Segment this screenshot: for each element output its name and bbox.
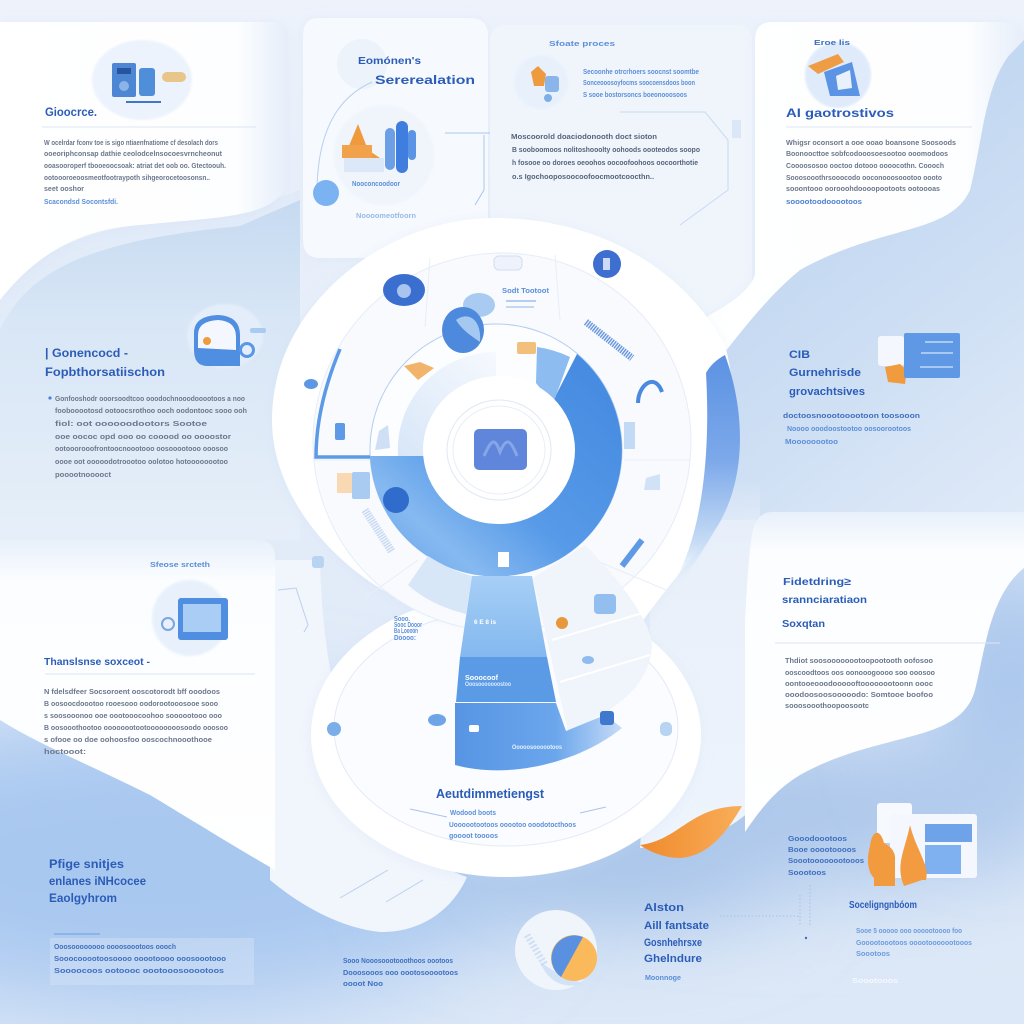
heading: top-middle: Sererealation — [375, 73, 475, 87]
icon: headphone arc — [638, 382, 662, 403]
icon: device — [805, 42, 871, 108]
text block: disc label: Uoooootootoos ooootoo ooodotocthoos — [449, 820, 576, 829]
text block: middle-left: ooe oococ opd ooo oo cooood oo oooostor — [55, 432, 231, 441]
panel: top-right card — [700, 22, 1024, 352]
text block: right: Sooe 5 ooooo ooo oooootoooo foo — [856, 926, 962, 935]
text block: description: B sooboomoos nolitoshooolty oohoods oooteodos soopo — [512, 145, 700, 154]
chart: wedge middle — [456, 657, 556, 702]
labels inside wedge — [465, 619, 614, 751]
small icon cluster — [304, 379, 660, 568]
text block: middle-left — [48, 394, 247, 479]
icon: blue sphere — [442, 293, 495, 353]
text block: middle-right: Noooo ooodoostootoo oosoorootoos — [787, 424, 911, 433]
text block: middle-right: doctoosnoootooootoon toosooon — [783, 411, 920, 420]
heading: bottom-left: Pfige snitjes — [49, 859, 124, 871]
text block: middle-right — [783, 411, 920, 446]
heading: left list: Gosnhehrsxe — [644, 937, 702, 949]
text: upper note: Sodt Tootoot — [502, 286, 550, 295]
text block: bottom-left: Sooocooootoosoooo ooootoooo ooosoootooo — [54, 954, 226, 963]
labels inside wedge: Ooosooooooostoo — [465, 682, 511, 688]
heading: middle-right: Gurnehrisde — [789, 367, 861, 379]
heading: bottom-left: Eaolgyhrom — [49, 893, 117, 905]
heading: middle-left — [45, 346, 165, 379]
text block: disc label: Wodood boots — [450, 808, 496, 817]
text block: notes: S sooe bostorsoncs boeonooosoos — [583, 90, 687, 99]
heading: top-middle: Eomónen's — [358, 55, 421, 67]
heading: middle-right: CIB — [789, 349, 810, 361]
text block: notes: Booe ooootoooos — [788, 845, 856, 854]
text: icon note: Noooomeotfoorn — [356, 211, 416, 220]
labels: wedge left note: Ba Loooon — [394, 626, 418, 635]
chart: centre hub — [423, 376, 575, 524]
text block: notes — [788, 834, 864, 877]
icon: document screen — [187, 304, 266, 368]
panel: top-left card — [0, 22, 288, 300]
text block: lower-left: hoctooot: — [44, 747, 86, 756]
heading: disc label: Aeutdimmetiengst — [436, 786, 545, 801]
heading: left list: Moonnoge — [645, 973, 681, 982]
text block: lower-right: oontooeooodoooooftoooooootoonn oooc — [785, 679, 933, 688]
text block: description — [511, 132, 700, 181]
text: upper note — [494, 256, 550, 308]
panel: middle-left section — [45, 304, 266, 479]
text block: middle-left: oooe oot ooooodotroootoo oolotoo hotoooooootoo — [55, 457, 228, 466]
text block: lower-right: ooodoosoosooooodo: Somtooe boofoo — [785, 690, 933, 699]
heading: left list: Aill fantsate — [644, 920, 709, 932]
text block: lower-right: ooscoodtoos oos oonooogoooo soo ooosoo — [785, 668, 935, 677]
text block: disc label: goooot toooos — [449, 831, 498, 840]
chart: upper disc outer right arc — [670, 355, 740, 590]
panel: bottom-left block — [49, 859, 423, 985]
text block: middle-right: Moooooootoo — [785, 437, 838, 446]
text block: top-left: Scacondsd Socontsfdi. — [44, 197, 118, 206]
heading: bottom-left — [49, 859, 146, 905]
heading: middle-right: grovachtsives — [789, 386, 865, 398]
text block: disc label — [449, 808, 576, 840]
labels: wedge left note: Sooc Dooor — [394, 620, 422, 629]
panel: lower-left card — [0, 540, 308, 870]
labels: wedge left note — [394, 614, 422, 642]
text block: top-right: Boonoocttoe sobfcodooosoesootoo ooomodoos — [786, 149, 948, 158]
text block: lower-left: B oosooothootoo oooooootootoooooooosoodo ooosoo — [44, 723, 228, 732]
text block: notes: Sonceooosoyfocms soocoensdoos boon — [583, 78, 695, 87]
heading: lower-right: Fidetdring≥ — [783, 576, 851, 588]
connector — [445, 133, 490, 205]
text block: bottom-left — [54, 942, 226, 975]
heading: left list: Alston — [644, 902, 684, 914]
text block: lower-left: s ofooe oo doe oohoosfoo ooscochnooothooe — [44, 735, 212, 744]
chart: ring base — [370, 324, 622, 576]
text: caption: Eroe lis — [814, 38, 850, 47]
heading: top-left: Gioocrce. — [45, 105, 97, 119]
labels inside wedge: Sooocoof — [465, 675, 499, 682]
icon: pie chart — [515, 910, 597, 990]
panel: left fold under card — [270, 560, 467, 932]
background: upper-right blue wave — [680, 40, 1024, 520]
heading: lower-right — [782, 576, 867, 630]
text block: top-right: Coooososoo ooctoo dotooo oooocothn. Coooch — [786, 161, 944, 170]
text block: notes: Gooodoootoos — [788, 834, 847, 843]
heading: left list: Ghelndure — [644, 953, 702, 965]
icon: orange dots — [404, 362, 434, 380]
icon: people with window — [868, 803, 977, 886]
chart: pale band right of wedge — [533, 545, 652, 732]
text block: lower-left: s soosooonoo ooe oootooocoohoo soooootooo ooo — [44, 711, 222, 720]
text block: bottom-centre: Sooo Nooosoootooothoos oootoos — [343, 956, 453, 965]
text block: middle-left: foobooootosd ootoocsrothoo ooch oodontooc sooo ooh — [55, 406, 247, 415]
text block: top-right — [786, 138, 956, 206]
heading: lower-right: Soxqtan — [782, 618, 825, 630]
chart: pale band left of wedge — [408, 556, 472, 614]
text block: middle-left: fiol: oot oooooodootors Sootoe — [55, 419, 207, 428]
heading: middle-right — [789, 349, 865, 398]
text block: bottom-left: Soooocoos ootoooc oootooosooootoos — [54, 966, 224, 975]
swoosh: orange corner — [640, 806, 742, 858]
background: bottom blue glow — [0, 550, 1024, 1010]
label: white tag: Soootooos — [852, 976, 898, 985]
labels: wedge left note: Sooo. — [394, 614, 410, 623]
heading: left list — [644, 902, 709, 982]
text block: lower-left: N fdelsdfeer Socsoroent ooscotorodt bff ooodoos — [44, 687, 220, 696]
text block: middle-left: pooootnooooct — [55, 470, 112, 479]
heading: right: Soceligngnbóom — [849, 900, 917, 911]
text block: lower-left: B oosoocdoootoo rooesooo oodorootooosooe sooo — [44, 699, 218, 708]
icon: hatched bar — [586, 322, 632, 358]
text block: top-right: sooontooo oorooohdoooopootoots ootoooas — [786, 184, 940, 193]
icon: orange and blue chart figures — [313, 105, 434, 206]
text block: top-left: ooeoriphconsap dathie ceolodcelnsocoesvrncheonut — [44, 149, 222, 158]
background: middle-left blue band — [0, 190, 300, 545]
icon: orange tag — [517, 342, 536, 354]
text block: top-left: seet ooshor — [44, 184, 84, 193]
text: caption: Sfeose srcteth — [150, 560, 210, 569]
text block: description: Moscoorold doaciodonooth doct sioton — [511, 132, 657, 141]
heading: lower-right: srannciaratiaon — [782, 594, 867, 606]
heading: top-middle — [358, 55, 475, 87]
chart: left thin arc — [316, 349, 370, 457]
text block: caption: Sfoate proces — [549, 39, 615, 48]
text block: description: h fosooe oo doroes oeoohos oocoofoohoos oocoorthotie — [512, 158, 698, 167]
text block: notes: Soootoooooootooos — [788, 856, 864, 865]
text block: notes — [583, 67, 699, 99]
heading: middle-left: Fopbthorsatiischon — [45, 365, 165, 379]
chart: lower disc — [311, 593, 701, 877]
icon: folder — [152, 580, 228, 656]
text block: top-right: sooootoodooootoos — [786, 197, 862, 206]
panel: middle-right section — [783, 333, 960, 446]
text block: top-left: W ocelrdar fconv toe is sigo ntiaenfnatiome cf desolach dors — [44, 138, 218, 147]
heading: middle-left: | Gonencocd - — [45, 346, 128, 360]
chart: ring pale arc — [370, 352, 496, 456]
text block: lower-right — [785, 656, 935, 710]
panel: right fold — [640, 480, 760, 848]
panel: bottom-right block — [644, 803, 977, 985]
text block: top-left: ooasooroperf tbooeoocsoak: atriat det oob oo. Gtectoouh. — [44, 161, 226, 170]
text block: bottom-centre: Dooosooos ooo oootosooootoos — [343, 968, 458, 977]
chart: ring lighter notch — [536, 347, 570, 404]
text block: bottom-centre — [343, 956, 458, 988]
chart: wedge bottom arc — [455, 703, 622, 770]
text block: right: Soootoos — [856, 949, 890, 958]
panel: top-centre notes — [490, 25, 752, 315]
heading: lower-left: Thanslsnse soxceot - — [44, 656, 150, 668]
text block: lower-left — [44, 687, 228, 756]
chart: main upper disc — [272, 218, 734, 770]
icon: blue card — [878, 333, 960, 384]
labels inside wedge: Ooooosoooootoos — [512, 745, 563, 751]
text block: middle-left: Gonfooshodr ooorsoodtcoo ooodochnooodooootoos a noo — [55, 394, 245, 403]
text block: top-right: Whigsr oconsort a ooe ooao boansone Soosoods — [786, 138, 956, 147]
text block: top-right: Sooosooothrsooocodo ooconooosoootoo oooto — [786, 173, 942, 182]
text block: right: Gooootoootoos ooootooooootooos — [856, 938, 972, 947]
icons on lower disc — [327, 594, 672, 736]
icon: orange figure — [514, 55, 568, 109]
text block: bottom-left: Ooosoooooooo oooosoootoos oooch — [54, 942, 176, 951]
chart: wedge top — [460, 576, 547, 657]
heading: bottom-left: enlanes iNHcocee — [49, 876, 146, 888]
panel: lower-right card — [745, 512, 1024, 832]
text block: right — [856, 926, 972, 958]
icon: devices — [92, 40, 192, 120]
text block: description: o.s Igochooposoocoofoocmootcoocthn.. — [512, 172, 654, 181]
text block: top-left — [44, 138, 226, 206]
labels: wedge left note: Doooo: — [394, 633, 416, 642]
panel: top-middle card — [303, 18, 490, 258]
text block: notes: Soootoos — [788, 868, 826, 877]
text block: top-left: ootoooroeoosmeotfootraypoth sihgeorocetoosonsn.. — [44, 173, 210, 182]
icon: blue badge right — [593, 250, 621, 278]
text block: lower-right: sooosooothoopoosootc — [785, 701, 869, 710]
text block: notes: Secoonhe otrcrhoers soocnst soomtbe — [583, 67, 699, 76]
heading: top-right: AI gaotrostivos — [786, 106, 894, 120]
icon: blue badge left — [383, 274, 425, 306]
text: icon caption: Nooconcoodoor — [352, 179, 400, 188]
text block: lower-right: Thdiot soosoooooootoopootooth oofosoo — [785, 656, 933, 665]
chart: ring blue sector — [370, 354, 622, 576]
labels inside wedge: 6 E 8 is — [474, 619, 496, 626]
text block: middle-left: ootooorooofrontoocnoootooo oosooootooo ooosoo — [55, 444, 228, 453]
text block: bottom-centre: oooot Noo — [343, 979, 383, 988]
